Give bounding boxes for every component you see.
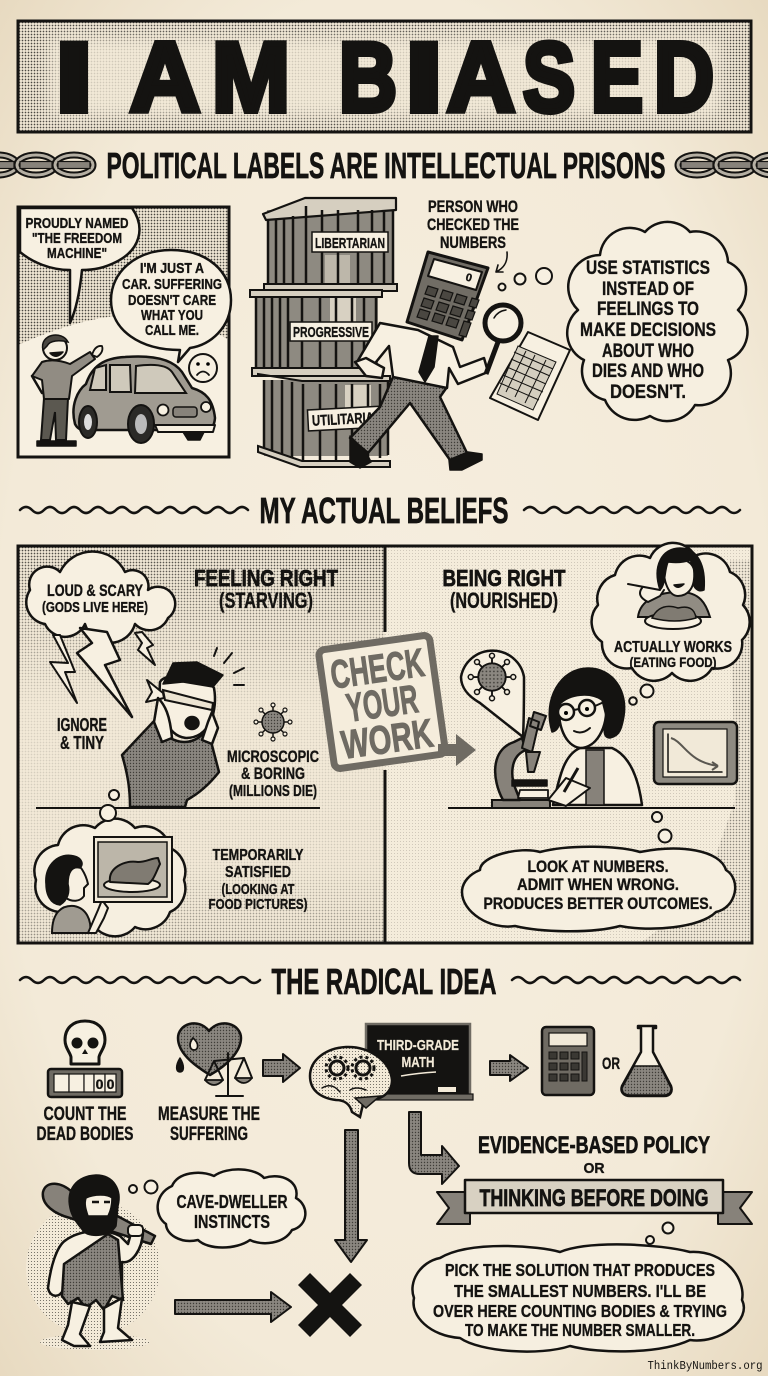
heading: the radical idea: THE RADICAL IDEA (272, 961, 496, 1002)
cloud: loud and scary: (GODS LIVE HERE) (42, 600, 148, 616)
icon: heart and scales (177, 1023, 252, 1096)
label: ignore and tiny: & TINY (60, 733, 104, 753)
callout: pick the solution: PICK THE SOLUTION THAT PRODUCES (445, 1260, 715, 1280)
thought bubble: food pictures (34, 790, 185, 936)
label: count the dead bodies: DEAD BODIES (36, 1124, 134, 1145)
spreadsheet (490, 332, 570, 420)
person with calculator head (350, 252, 570, 470)
label: temporarily satisfied: FOOD PICTURES) (208, 896, 308, 913)
chalkboard: third-grade math (366, 1024, 473, 1100)
speech bubble: just a car: DOESN'T CARE (128, 293, 216, 309)
label: microscopic and boring: MICROSCOPIC (227, 747, 319, 766)
title banner: I (55, 22, 93, 132)
calculator head: 0 (464, 272, 473, 285)
stamp: check your work: WORK (339, 711, 436, 768)
cage: libertarian: LIBERTARIAN (315, 235, 385, 252)
heading: being right: (NOURISHED) (450, 588, 558, 613)
woman viewing picture (46, 855, 108, 933)
thought cloud: actually works: ACTUALLY WORKS (614, 639, 732, 656)
cage: progressive (250, 290, 382, 376)
title banner: I (405, 22, 443, 132)
label: person who checked the numbers (427, 197, 519, 272)
stamp: check your work (318, 635, 446, 769)
heading: my actual beliefs: MY ACTUAL BELIEFS (260, 490, 508, 531)
panel: freedom machine comic (18, 207, 231, 457)
speech bubble: just a car: WHAT YOU (141, 308, 203, 324)
label: person who checked the numbers: NUMBERS (440, 233, 506, 252)
arrow: caveman to x (175, 1292, 291, 1322)
thought bubble: cave-dweller instincts (129, 1169, 305, 1248)
cloud callout: use statistics: MAKE DECISIONS (580, 320, 716, 341)
icon: sad face (189, 354, 217, 382)
magnifying glass (485, 305, 521, 374)
title banner: E (591, 22, 643, 132)
magnified virus bubble (461, 651, 524, 737)
icon: skull and counter (48, 1021, 122, 1097)
callout: pick the solution: TO MAKE THE NUMBER SMALLER. (465, 1320, 695, 1340)
callout: look at numbers: ADMIT WHEN WRONG. (517, 875, 679, 894)
chalkboard: third-grade math: MATH (402, 1054, 434, 1071)
icon: skull and counter: 0 (96, 1076, 104, 1092)
heading: feeling right: FEELING RIGHT (194, 565, 338, 591)
label: temporarily satisfied: SATISFIED (225, 864, 291, 881)
speech bubble: freedom machine: MACHINE" (47, 246, 107, 262)
thought bubble: cave-dweller instincts: INSTINCTS (194, 1211, 270, 1232)
icon: skull and counter: 0 (107, 1076, 115, 1092)
cloud: loud and scary (26, 551, 175, 643)
icon: calculator (542, 1027, 594, 1095)
title banner: D (654, 22, 714, 132)
chalkboard: third-grade math: THIRD-GRADE (377, 1037, 459, 1054)
heading: feeling right: (STARVING) (219, 588, 313, 613)
speech bubble: freedom machine (20, 208, 139, 323)
cage: utilitarian: UTILITARIAN (312, 409, 382, 430)
title banner (18, 21, 751, 132)
tablet chart (654, 722, 737, 784)
icon: car (73, 356, 215, 443)
label: or: OR (602, 1054, 620, 1073)
shirt and arms (357, 323, 488, 388)
cloud callout: use statistics: ABOUT WHO (602, 341, 694, 362)
calculator head (407, 252, 488, 340)
label: person who checked the numbers: PERSON WHO (428, 197, 518, 216)
label: person who checked the numbers: CHECKED THE (427, 215, 519, 234)
man blindfolded covering ears (122, 648, 244, 807)
tie (419, 336, 438, 382)
lightning bolts (50, 628, 155, 717)
left chain ornament (0, 155, 93, 175)
panel: beliefs (18, 543, 752, 943)
callout: look at numbers: LOOK AT NUMBERS. (528, 857, 668, 876)
label: microscopic and boring: (MILLIONS DIE) (229, 783, 317, 800)
stamp: check your work: YOUR (344, 677, 421, 731)
speech bubble: just a car: CALL ME. (145, 323, 199, 339)
title banner: A (130, 22, 200, 132)
cage: utilitarian (258, 374, 390, 467)
speech bubble: just a car: I'M JUST A (140, 261, 204, 277)
title banner: S (523, 22, 575, 132)
icon: flask (621, 1026, 672, 1096)
cloud callout: use statistics: INSTEAD OF (602, 279, 694, 300)
ribbon: thinking before doing (437, 1180, 752, 1224)
icon: big x (298, 1273, 362, 1337)
heading: being right: BEING RIGHT (442, 565, 566, 591)
cloud: loud and scary: LOUD & SCARY (47, 581, 143, 600)
thought cloud: actually works: (EATING FOOD) (630, 654, 716, 670)
callout: look at numbers (462, 812, 735, 931)
arrow: stamp to being right (438, 734, 476, 766)
cloud callout: use statistics: DOESN'T. (610, 382, 686, 403)
callout: pick the solution: THE SMALLEST NUMBERS. I'LL BE (454, 1281, 706, 1301)
cloud callout: use statistics (567, 222, 747, 421)
title banner: M (212, 22, 290, 132)
cloud callout: use statistics: USE STATISTICS (586, 258, 710, 279)
label: temporarily satisfied: (LOOKING AT (222, 881, 294, 898)
heading: feeling right (194, 565, 338, 613)
speech bubble: just a car: CAR. SUFFERING (122, 277, 222, 293)
title banner: A (447, 22, 515, 132)
icon: brain with gears (310, 1047, 392, 1117)
arrow: to tools (490, 1055, 528, 1081)
speech bubble: just a car (111, 250, 231, 362)
callout: pick the solution (412, 1222, 744, 1352)
woman eating (628, 548, 710, 629)
label: temporarily satisfied: TEMPORARILY (212, 847, 304, 864)
callout: look at numbers: PRODUCES BETTER OUTCOMES. (484, 894, 712, 913)
microscope (492, 712, 550, 808)
thought bubbles: statistics (498, 268, 552, 290)
heading: being right (442, 565, 566, 613)
arrow: down to x (335, 1130, 367, 1262)
label: ignore and tiny (57, 715, 107, 753)
arrow: bent to evidence-based policy (409, 1112, 459, 1184)
stamp: check your work: CHECK (328, 641, 427, 698)
cages stack (250, 198, 397, 467)
label: or connector: OR (584, 1160, 605, 1177)
speech bubble: freedom machine: "THE FREEDOM (32, 231, 122, 247)
icon: virus (254, 703, 292, 741)
cloud callout: use statistics: FEELINGS TO (597, 299, 699, 320)
shoes (350, 436, 482, 470)
label: temporarily satisfied (208, 847, 308, 913)
label: measure the suffering: SUFFERING (170, 1124, 248, 1145)
label: ignore and tiny: IGNORE (57, 715, 107, 735)
arrow: to brain (263, 1054, 300, 1082)
label: measure the suffering: MEASURE THE (158, 1104, 260, 1125)
framed food picture (94, 837, 172, 902)
man pointing at car (32, 335, 102, 446)
thought bubble: cave-dweller instincts: CAVE-DWELLER (176, 1191, 288, 1212)
label: microscopic and boring: & BORING (241, 764, 305, 783)
label: measure the suffering (158, 1104, 260, 1145)
label: count the dead bodies: COUNT THE (44, 1104, 126, 1125)
cage: libertarian (263, 198, 397, 291)
label: count the dead bodies (36, 1104, 134, 1145)
trousers (350, 377, 467, 460)
caveman (26, 1175, 160, 1350)
right chain ornament (678, 155, 768, 175)
cage: progressive: PROGRESSIVE (293, 324, 369, 341)
speech bubble: freedom machine: PROUDLY NAMED (26, 216, 128, 232)
scientist at microscope (548, 668, 642, 806)
label: microscopic and boring (227, 747, 319, 800)
title banner: B (339, 22, 397, 132)
cloud callout: use statistics: DIES AND WHO (592, 361, 704, 382)
thought cloud: actually works (592, 543, 750, 705)
